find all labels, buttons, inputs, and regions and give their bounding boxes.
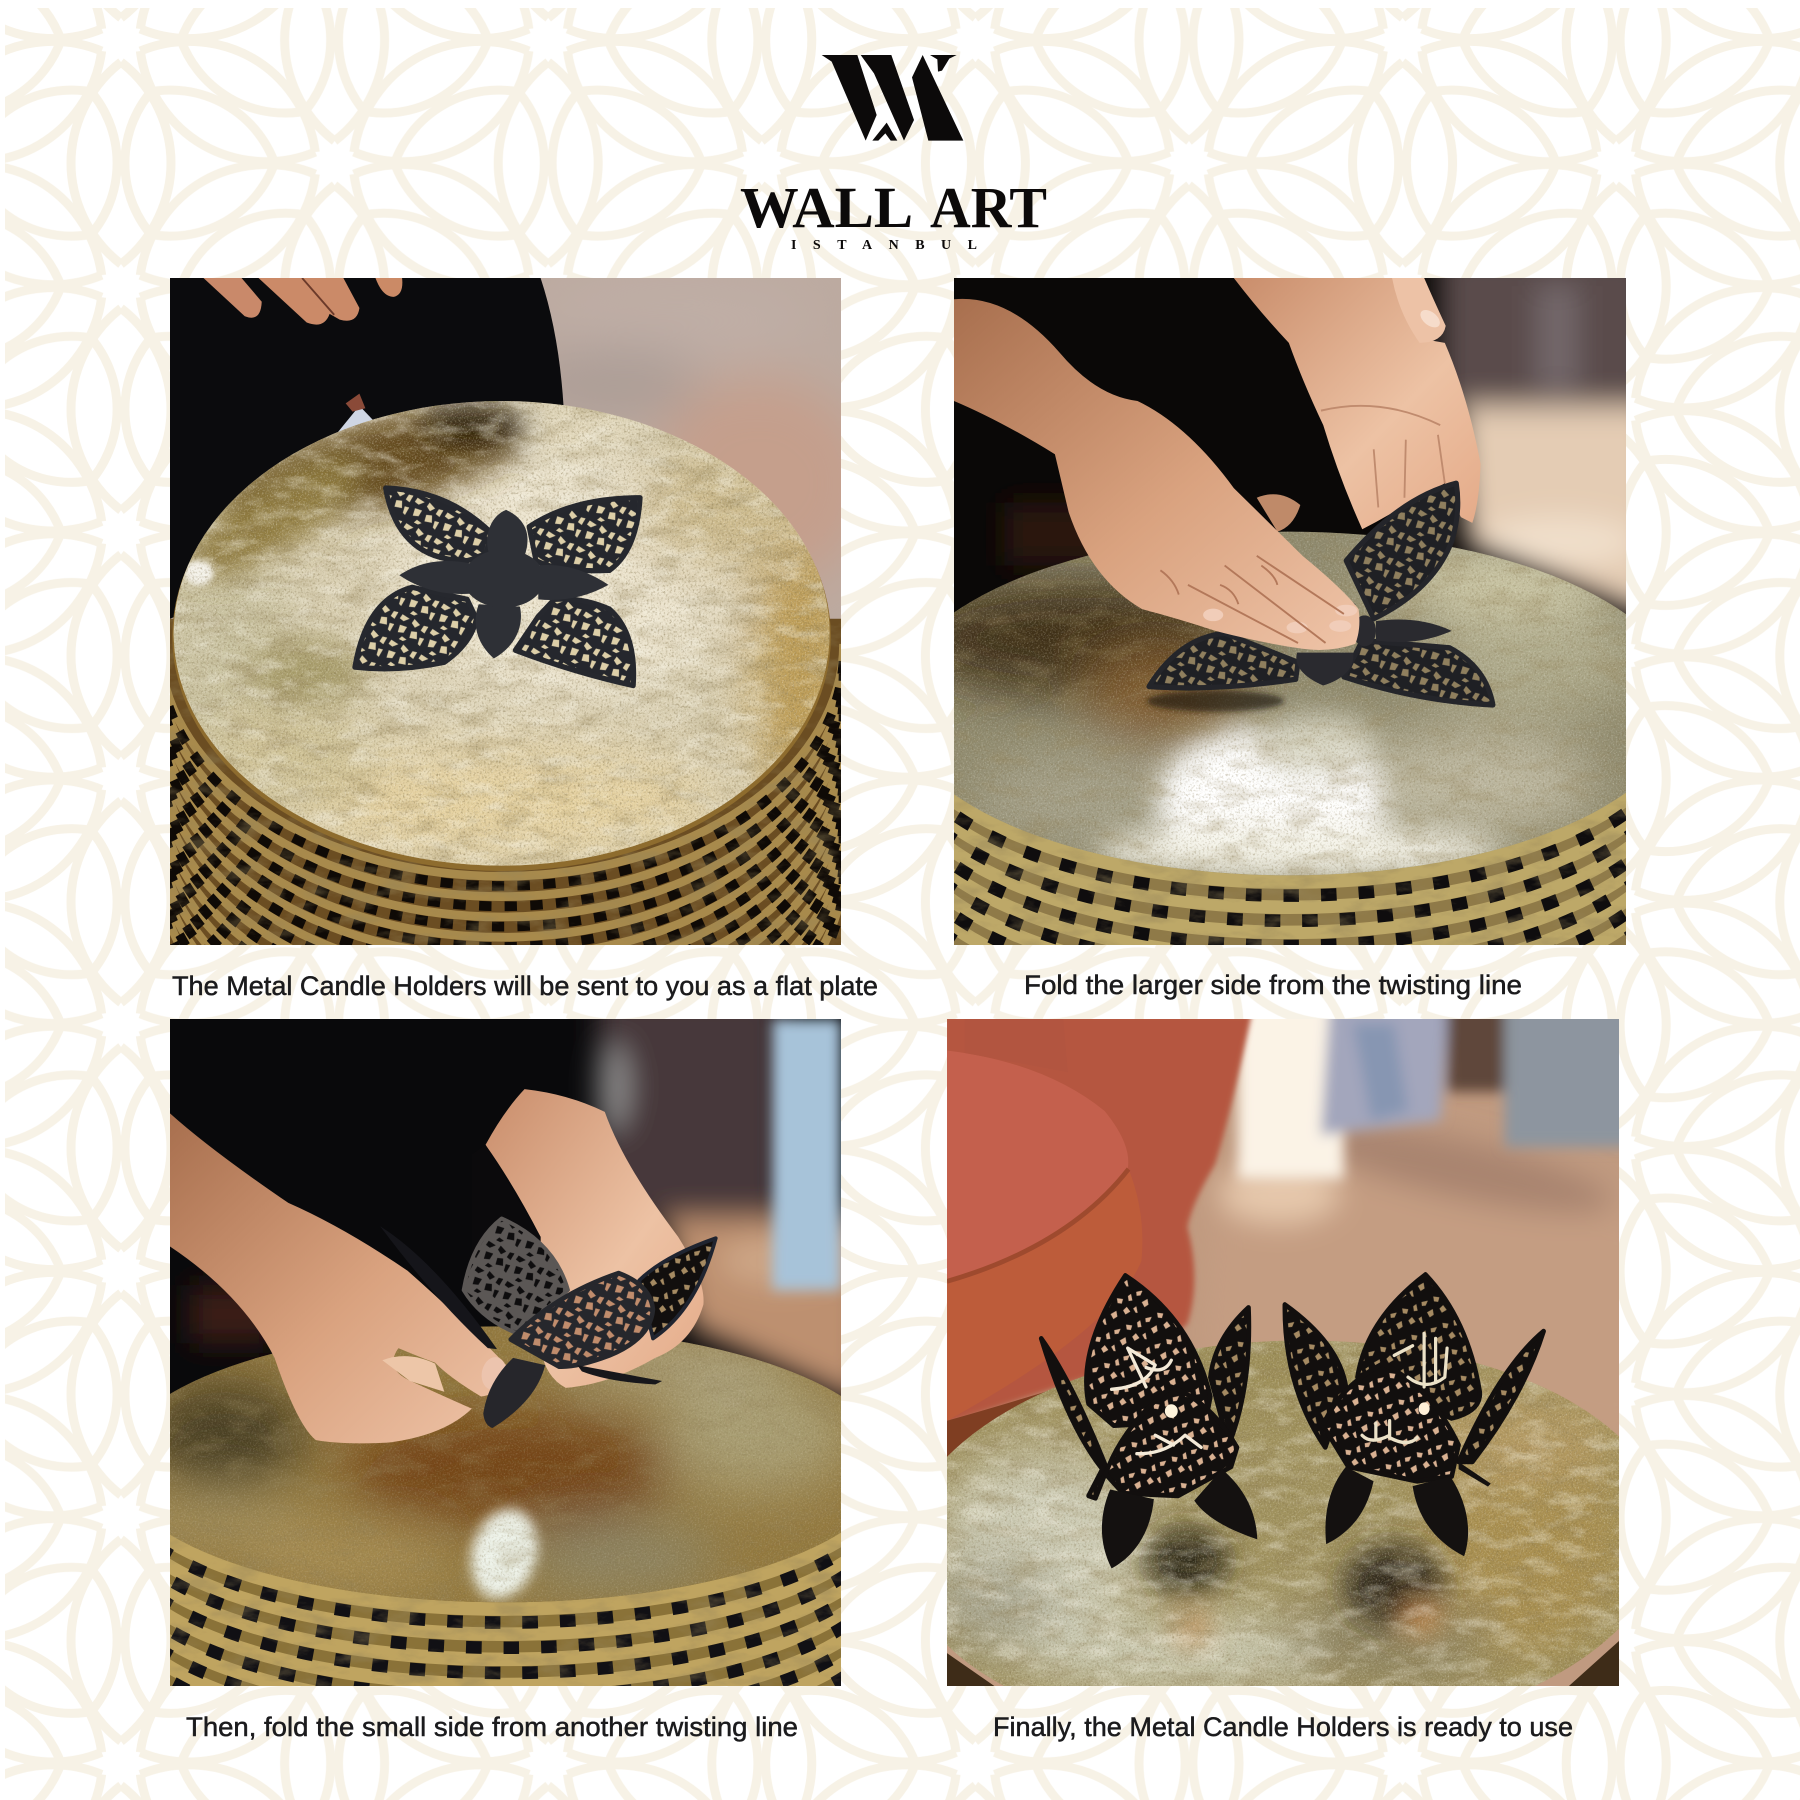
fingers (203, 278, 402, 325)
caption 3: Then, fold the small side from another twisting line (186, 1712, 798, 1742)
gold leaf tabletop (172, 401, 831, 871)
photo 1: flat plate on gold table (170, 278, 841, 945)
candle holder: left (1041, 1276, 1257, 1568)
sub-wordmark: ISTANBUL (791, 238, 977, 253)
wordmark (740, 175, 1047, 240)
caption 4: Finally, the Metal Candle Holders is ready to use (993, 1712, 1573, 1742)
icon: WM monogram (822, 55, 964, 141)
gold tabletop and weave (954, 532, 1626, 945)
folded holder: back leaves (464, 1218, 716, 1338)
hand: right hand holding holder (472, 1089, 704, 1388)
photo 4: finished candle holders (947, 1019, 1619, 1686)
partially folded plate (1149, 483, 1493, 705)
hand: pressing left hand (954, 299, 1359, 650)
flat metal candle holder plate (355, 488, 640, 686)
caption 1: The Metal Candle Holders will be sent to you as a flat plate (172, 971, 878, 1001)
coral armchair (944, 1014, 1252, 1479)
wordmark: ART (930, 175, 1047, 240)
caption 2: Fold the larger side from the twisting line (1024, 970, 1522, 1000)
folded holder: front leaves (380, 1226, 662, 1428)
blurred room background (1206, 1106, 1647, 1445)
gold tabletop and weave (170, 1326, 841, 1686)
woven drum side (160, 619, 843, 1110)
hand: raised right hand (1234, 278, 1481, 529)
photo 2: folding the larger side (954, 278, 1626, 945)
candle holder: right (1285, 1275, 1544, 1556)
photo 3: folding the small side (170, 1019, 841, 1686)
gold and silver tabletop (947, 1340, 1619, 1686)
hand: left hand pinching holder (170, 1113, 509, 1443)
logo: Wall Art Istanbul (740, 55, 1047, 253)
wordmark: WALL (740, 175, 913, 240)
